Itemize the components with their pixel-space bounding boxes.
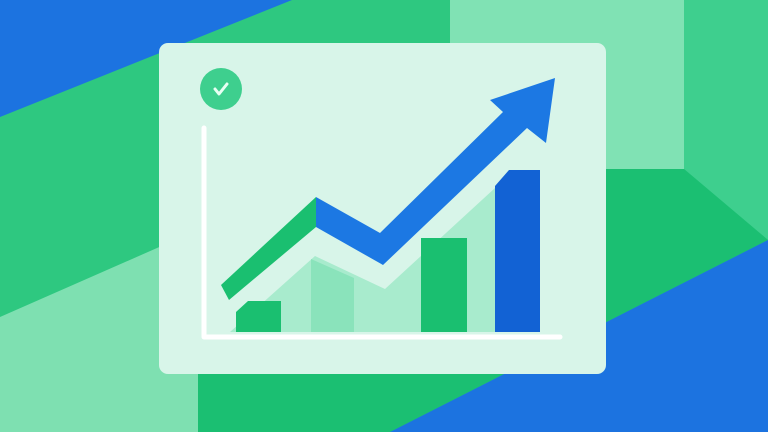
light area under line (230, 188, 495, 332)
bar chart (236, 170, 540, 332)
trend line: blue arrow (316, 78, 555, 265)
axes (204, 128, 560, 337)
icon: check badge (200, 68, 242, 110)
panel (159, 43, 606, 374)
trend line: green segment (221, 197, 316, 300)
